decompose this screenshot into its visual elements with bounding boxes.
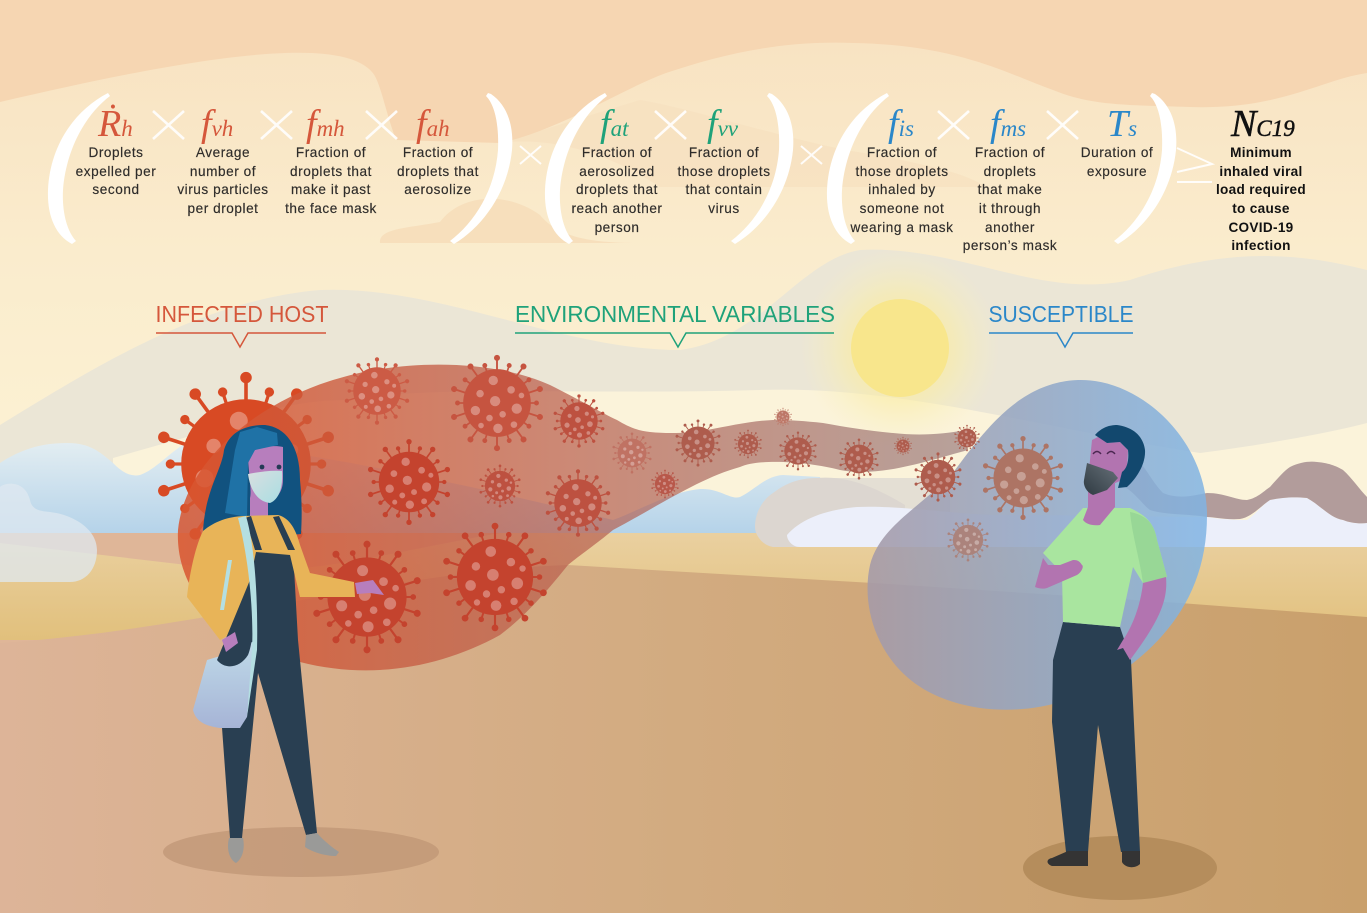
term: f ms xyxy=(963,103,1057,253)
term: f at: droplets that xyxy=(576,182,658,197)
term: N C19: infection xyxy=(1231,238,1291,253)
term: f vv: Fraction of xyxy=(689,145,759,160)
operators xyxy=(153,111,1212,182)
term: f ms: fms xyxy=(990,103,1026,145)
term: f ah: droplets that xyxy=(397,164,479,179)
term: R h: Droplets xyxy=(88,145,144,160)
term: R h xyxy=(76,103,156,197)
term: N C19 xyxy=(1216,103,1306,253)
term: N C19: COVID-19 xyxy=(1228,220,1294,235)
term: f ms: person’s mask xyxy=(963,238,1057,253)
bag pouch xyxy=(217,580,253,666)
bag xyxy=(193,640,255,728)
background: peach top band xyxy=(0,0,1367,143)
term: f ah xyxy=(397,103,479,197)
term: f mh: fmh xyxy=(306,103,345,145)
term: f mh: the face mask xyxy=(285,201,377,216)
term: f is: inhaled by xyxy=(868,182,936,197)
susceptible bubble xyxy=(868,380,1207,710)
inner bag strap xyxy=(220,560,232,610)
term: f ms: Fraction of xyxy=(975,145,1045,160)
background: mid peach shape centre xyxy=(500,100,986,187)
heading: susceptible xyxy=(988,301,1134,347)
virus: large behind host xyxy=(157,372,335,556)
shadow: susceptible xyxy=(1023,836,1217,900)
background: cream wave xyxy=(113,390,1367,540)
term: f mh xyxy=(285,103,377,216)
term: N C19: inhaled viral xyxy=(1219,164,1303,179)
term: f vh: number of xyxy=(190,164,256,179)
droplet plume xyxy=(178,365,968,670)
neck and face xyxy=(248,446,283,520)
term: f at: person xyxy=(595,220,639,235)
equation xyxy=(48,93,1306,253)
term: R h: Ṙh xyxy=(97,103,133,145)
hair highlight xyxy=(225,427,278,517)
figure: infected host xyxy=(187,425,384,863)
eyes xyxy=(260,465,281,469)
term: f mh: droplets that xyxy=(290,164,372,179)
shirt xyxy=(1043,508,1167,627)
heading: susceptible: SUSCEPTIBLE xyxy=(988,301,1134,327)
background: clouds xyxy=(0,478,1367,582)
face xyxy=(1088,436,1128,490)
term: T s: Duration of xyxy=(1081,145,1153,160)
forearm xyxy=(1035,558,1083,589)
overall straps xyxy=(245,516,295,550)
bag strap xyxy=(238,516,257,717)
pocket hand xyxy=(222,632,238,652)
term: f mh: Fraction of xyxy=(296,145,366,160)
shadow: host xyxy=(163,827,439,877)
term: f mh: make it past xyxy=(291,182,371,197)
term: T s: exposure xyxy=(1087,164,1147,179)
term: f is: Fraction of xyxy=(867,145,937,160)
background: sun xyxy=(800,248,1000,448)
term: f vv: virus xyxy=(708,201,740,216)
term: N C19: load required xyxy=(1216,182,1306,197)
term: f ms: it through xyxy=(979,201,1041,216)
term: f is: those droplets xyxy=(855,164,949,179)
term: R h: expelled per xyxy=(76,164,156,179)
shirt sleeve shade xyxy=(1130,512,1167,583)
shoes xyxy=(1122,851,1140,867)
term: N C19: Minimum xyxy=(1230,145,1292,160)
term: f at xyxy=(571,103,663,235)
heading: environmental variables xyxy=(515,301,835,347)
neck xyxy=(1083,483,1115,525)
airborne viruses xyxy=(312,355,1064,653)
term: T s: Ts xyxy=(1107,103,1137,145)
term: f at: fat xyxy=(600,103,629,145)
near arm xyxy=(1117,577,1166,660)
parentheses xyxy=(48,93,1176,244)
heading: infected host xyxy=(156,301,328,347)
figure: susceptible xyxy=(1035,425,1167,867)
background: sand xyxy=(0,533,1367,913)
term: f is: fis xyxy=(888,103,914,145)
background: smoke stream xyxy=(1125,455,1367,523)
term: f vh: fvh xyxy=(201,103,233,145)
face mask xyxy=(1084,463,1118,495)
term: f at: Fraction of xyxy=(582,145,652,160)
term: f is: wearing a mask xyxy=(850,220,953,235)
background: distant hills xyxy=(0,250,1367,540)
eyes xyxy=(1093,452,1115,454)
term: R h: second xyxy=(92,182,140,197)
heading: infected host: INFECTED HOST xyxy=(156,301,328,327)
term: f is xyxy=(850,103,953,235)
term: f vv xyxy=(677,103,771,216)
hair xyxy=(203,425,302,540)
hand xyxy=(355,580,384,595)
term: f vh: virus particles xyxy=(177,182,269,197)
term: f vv: those droplets xyxy=(677,164,771,179)
shoes xyxy=(228,838,244,863)
term: f vv: that contain xyxy=(686,182,762,197)
term: f vh: Average xyxy=(196,145,250,160)
term: f at: aerosolized xyxy=(579,164,655,179)
term: f ms: that make xyxy=(978,182,1042,197)
hair xyxy=(1095,425,1145,488)
term: N C19: to cause xyxy=(1232,201,1290,216)
term: f vv: fvv xyxy=(707,103,739,145)
term: f vh xyxy=(177,103,269,216)
background: mid peach shape xyxy=(380,199,640,243)
term: N C19: NC19 xyxy=(1230,103,1295,145)
cardigan xyxy=(187,515,355,640)
term: f vh: per droplet xyxy=(187,201,259,216)
heading: environmental variables: ENVIRONMENTAL VARIABLES xyxy=(515,301,835,327)
term: f ah: Fraction of xyxy=(403,145,473,160)
term: T s xyxy=(1081,103,1153,179)
trousers xyxy=(1052,622,1140,852)
term: f ah: aerosolize xyxy=(404,182,472,197)
overalls xyxy=(220,550,317,838)
background: sky xyxy=(0,0,1367,560)
background: blue horizon xyxy=(0,440,830,533)
term: f at: reach another xyxy=(571,201,663,216)
term: f is: someone not xyxy=(860,201,944,216)
term: f ms: another xyxy=(985,220,1035,235)
term: f ah: fah xyxy=(416,103,450,145)
term: f ms: droplets xyxy=(984,164,1036,179)
face mask xyxy=(248,471,282,503)
